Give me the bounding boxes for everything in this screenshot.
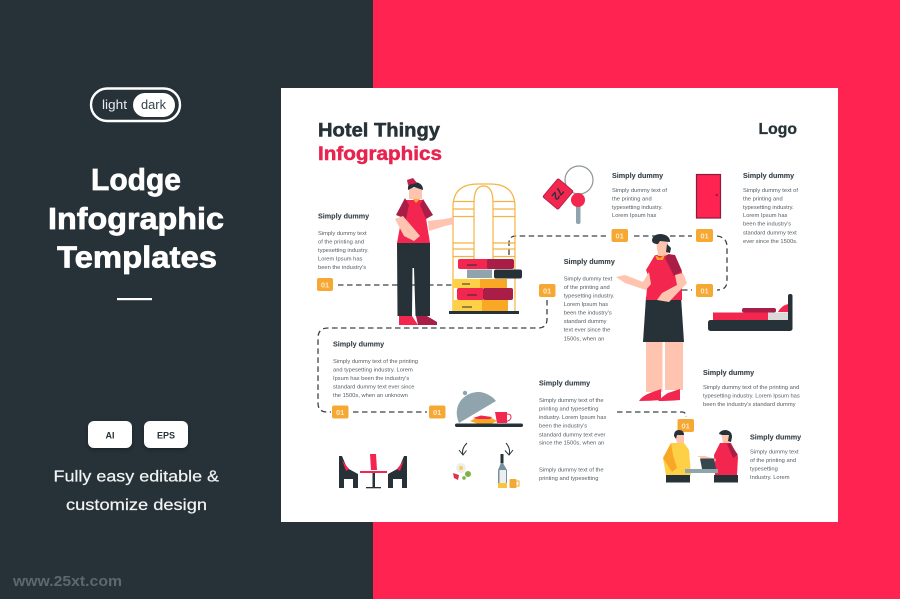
illustration: cloche and tray [455, 391, 523, 427]
title underline [117, 298, 152, 300]
text block: bellhop: Simply dummy [318, 212, 369, 220]
text block: front desk: typesetting [750, 466, 778, 472]
arrow: to drinks [505, 443, 513, 455]
text block: receptionist: Simply dummy text [564, 276, 613, 282]
subtitle: Fully easy editable & [54, 468, 219, 486]
illustration: bottle and beer [498, 454, 519, 488]
text block: front desk: Industry. Lorem [750, 475, 790, 481]
illustration: bed [708, 294, 792, 331]
toggle: light dark: light [102, 97, 127, 112]
text block: key: Lorem Ipsum has [612, 213, 657, 219]
text block: key: Simply dummy [612, 171, 663, 180]
text block: payment: Simply dummy [703, 368, 754, 377]
logo: Logo [758, 121, 797, 138]
arrow: to salad [459, 443, 467, 455]
text block: food: printing and typesetting [539, 406, 598, 412]
text block: bellhop: Simply dummy text [318, 231, 367, 237]
main title: Templates [57, 240, 217, 274]
text block: food: since the 1500s, when an [539, 441, 604, 447]
badge 01: receptionist: 01 [543, 286, 551, 296]
illustration: door [696, 174, 720, 218]
heading: Hotel Thingy Infographics: Hotel Thingy [318, 120, 440, 142]
text block: receptionist: Simply dummy [564, 257, 615, 266]
subtitle [54, 468, 219, 514]
text block: door: Lorem Ipsum has [743, 213, 788, 219]
text block: food: standard dummy text ever [539, 432, 606, 438]
text block: door: Simply dummy [743, 171, 794, 180]
badge 01: door: 01 [700, 232, 709, 240]
text block: food: Simply dummy text of the [539, 398, 604, 404]
text block: bellhop: been the industry's [318, 265, 366, 271]
badge 01: front desk: 01 [682, 422, 690, 430]
illustration: bellhop [395, 178, 454, 325]
text block: food: been the industry's [539, 424, 587, 430]
illustration: key: 72 [549, 185, 566, 202]
text block: bellhop [318, 212, 369, 271]
text block: receptionist: 1500s, when an [564, 336, 604, 342]
text block: payment: Simply dummy text of the printing and [703, 385, 799, 391]
text block: payment [703, 368, 800, 408]
badge 01: door [696, 229, 713, 242]
text block: receptionist: text ever since the [564, 328, 610, 334]
text block: dining: standard dummy text ever since [333, 384, 414, 390]
text block: door: Simply dummy text of [743, 188, 798, 194]
text block: key [612, 171, 667, 219]
badge 01: dining: 01 [336, 408, 344, 417]
illustration: dining table and chairs [339, 454, 407, 488]
text block: front desk [750, 432, 801, 481]
illustration: key [543, 166, 593, 224]
text block: food: industry. Lorem Ipsum has [539, 415, 606, 421]
watermark: www.25xt.com [12, 573, 122, 590]
dashed connector path [318, 236, 727, 417]
main title [48, 162, 224, 274]
text block: door: been the industry's [743, 222, 791, 228]
badge 01: dining [332, 406, 348, 418]
illustration: salad plate [453, 463, 471, 480]
illustration: luggage cart [449, 184, 522, 314]
badge 01: front desk [678, 419, 694, 432]
button: EPS: EPS [157, 430, 175, 440]
badge 01: bed [696, 284, 713, 297]
badge 01: receptionist [539, 284, 556, 297]
text block: food: printing and typesetting [539, 476, 598, 482]
text block: dining: and typesetting industry. Lorem [333, 367, 413, 373]
text block: front desk: Simply dummy [750, 432, 801, 441]
badge 01: key [612, 229, 628, 242]
text block: payment: typesetting industry. Lorem Ipsum has [703, 394, 800, 400]
text block: receptionist: standard dummy [564, 319, 607, 325]
badge 01: key: 01 [616, 232, 624, 240]
button: AI [88, 421, 132, 448]
text block: food [539, 378, 606, 482]
text block: dining: Simply dummy [333, 340, 384, 348]
main title: Infographic [48, 201, 224, 236]
text block: food: Simply dummy text of the [539, 467, 604, 473]
badge 01: food [429, 406, 446, 418]
text block: front desk: Simply dummy text [750, 449, 799, 455]
text block: key: typesetting industry. [612, 205, 663, 211]
badge 01: bellhop [317, 278, 333, 291]
text block: door: ever since the 1500s. [743, 239, 798, 245]
red background panel [373, 0, 900, 599]
text block: bellhop: Lorem Ipsum has [318, 256, 363, 262]
text block: door [743, 171, 798, 245]
badge 01: food: 01 [433, 408, 441, 417]
text block: key: the printing and [612, 196, 652, 202]
text block: front desk: of the printing and [750, 458, 796, 464]
text block: receptionist: Lorem Ipsum has [564, 302, 608, 308]
text block: receptionist: typesetting industry. [564, 294, 615, 300]
badge 01: bed: 01 [700, 286, 709, 296]
subtitle: customize design [66, 497, 207, 514]
text block: receptionist [564, 257, 615, 342]
text block: receptionist: of the printing and [564, 285, 610, 291]
toggle: light dark [91, 88, 180, 121]
text block: dining: Ipsum has been the industry's [333, 376, 409, 382]
text block: dining: the 1500s, when an unknown [333, 393, 408, 399]
text block: dining [333, 340, 418, 399]
text block: key: Simply dummy text of [612, 188, 667, 194]
text block: door: standard dummy text [743, 230, 797, 236]
text block: door: the printing and [743, 196, 783, 202]
heading: Hotel Thingy Infographics [318, 120, 442, 165]
text block: receptionist: been the industry's [564, 310, 612, 316]
main title: Lodge [91, 162, 181, 197]
text block: bellhop: typesetting industry. [318, 248, 369, 254]
dark background panel [0, 0, 373, 599]
badge 01: bellhop: 01 [321, 280, 329, 290]
toggle: light dark: dark [141, 97, 166, 112]
illustration: receptionist woman [616, 234, 687, 401]
button: AI: AI [106, 430, 114, 440]
white infographic card [281, 88, 838, 522]
text block: payment: been the industry's standard dummy [703, 402, 796, 408]
heading: Hotel Thingy Infographics: Infographics [318, 143, 442, 165]
illustration: front desk staff [663, 430, 738, 482]
text block: door: typesetting industry. [743, 205, 794, 211]
text block: dining: Simply dummy text of the printing [333, 359, 418, 365]
text block: bellhop: of the printing and [318, 239, 364, 245]
text block: food: Simply dummy [539, 378, 590, 388]
button: EPS [144, 421, 188, 448]
